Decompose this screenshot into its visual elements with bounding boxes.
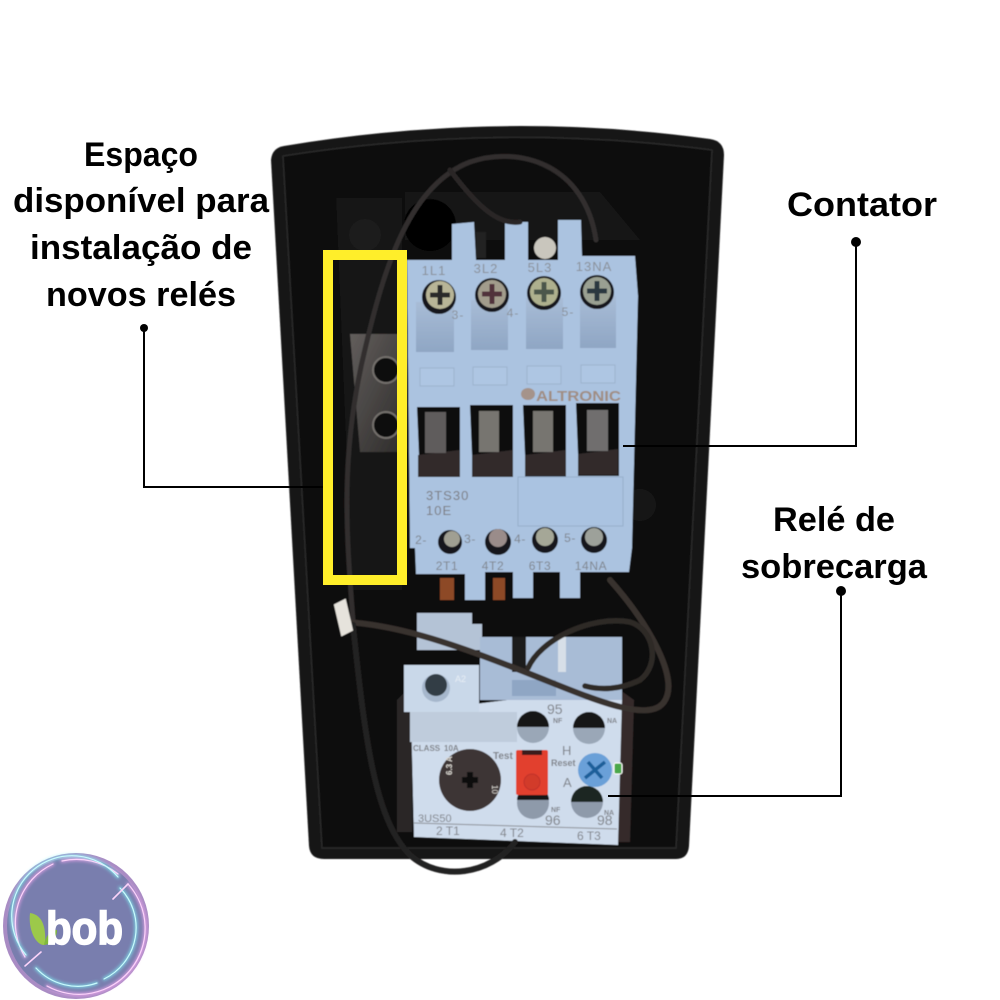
terminal labels: 4-: [507, 306, 519, 320]
dial: [439, 749, 501, 811]
bottom labels: 4-: [514, 532, 526, 546]
relay text: NF: [551, 807, 561, 814]
bottom labels: 6T3: [529, 559, 551, 573]
bottom labels: [415, 531, 607, 573]
model text: 3TS30: [426, 488, 469, 503]
heading: space for new relays: instalação de: [30, 229, 252, 267]
logo: bob: [3, 853, 149, 999]
relay text: [413, 701, 617, 843]
relay text: 4 T2: [500, 826, 524, 840]
terminal labels: 3L2: [474, 261, 498, 276]
model text: [426, 488, 469, 518]
heading: overload relay: Relé de: [773, 501, 895, 539]
relay text: NA: [604, 810, 614, 817]
marking panel: [518, 477, 623, 526]
logo leaves: [30, 913, 45, 945]
red test button: [516, 750, 548, 795]
heading: overload relay: sobrecarga: [741, 548, 928, 586]
brand: ALTRONIC: [536, 388, 621, 405]
overload relay: [397, 613, 634, 845]
bottom labels: 2-: [415, 533, 427, 547]
terminal labels: 1L1: [422, 263, 446, 278]
black wires: [335, 156, 668, 872]
terminal holes: [517, 711, 605, 819]
bottom screws: [438, 527, 607, 555]
relay text: 3US50: [418, 813, 452, 825]
bottom labels: 14NA: [575, 559, 607, 573]
leader: overload relay: [608, 586, 846, 796]
heading: overload relay: [741, 501, 928, 586]
bottom labels: 2T1: [436, 559, 458, 573]
leader: available space: [140, 324, 323, 487]
leader: contator: [623, 237, 861, 446]
indicator: [614, 763, 622, 774]
enclosure box: [271, 126, 724, 859]
bottom labels: 5-: [564, 531, 576, 545]
relay text: NA: [607, 718, 617, 725]
mounting plate: [350, 334, 407, 452]
neon rings: [12, 856, 145, 994]
contact windows: [416, 296, 616, 352]
actuator slots: [417, 403, 619, 477]
heading: space for new relays: Espaço: [84, 136, 198, 174]
terminal labels: 13NA: [576, 259, 612, 274]
top screw and bracket: [534, 237, 556, 259]
relay text: Test: [493, 751, 513, 762]
model text: 10E: [426, 503, 452, 518]
highlight: yellow rectangle: [328, 255, 402, 580]
blue reset knob: [578, 753, 612, 787]
label frames: [420, 365, 615, 386]
overload relay: A2: [455, 674, 466, 684]
contactor: [407, 220, 638, 600]
relay text: 95: [547, 701, 563, 717]
terminal labels: 5L3: [528, 260, 552, 275]
dial: 6.3 A: [445, 756, 454, 775]
heading: space for new relays: novos relés: [46, 276, 236, 314]
relay text: 96: [545, 812, 561, 828]
terminal labels: 5-: [562, 305, 574, 319]
bottom labels: 3-: [464, 532, 476, 546]
logo wordmark: bob: [46, 902, 123, 954]
screws: [422, 275, 614, 314]
heading: space for new relays: disponível para: [13, 182, 270, 220]
relay text: 6 T3: [577, 829, 601, 843]
relay text: 10A: [444, 744, 459, 753]
terminal labels: [422, 259, 612, 322]
relay text: A: [563, 775, 572, 790]
relay text: 2 T1: [436, 824, 460, 838]
relay text: Reset: [551, 758, 576, 768]
dial: 10: [490, 785, 499, 794]
heading: contator: Contator: [787, 186, 937, 224]
relay text: CLASS: [413, 744, 441, 753]
relay text: H: [562, 743, 571, 758]
heading: space for new relays: [13, 136, 270, 314]
terminal labels: 3-: [452, 308, 464, 322]
relay text: NF: [553, 718, 563, 725]
bottom labels: 4T2: [482, 559, 504, 573]
relay text: 98: [597, 812, 613, 828]
photo: enclosure with contactor and relay: [271, 126, 724, 872]
